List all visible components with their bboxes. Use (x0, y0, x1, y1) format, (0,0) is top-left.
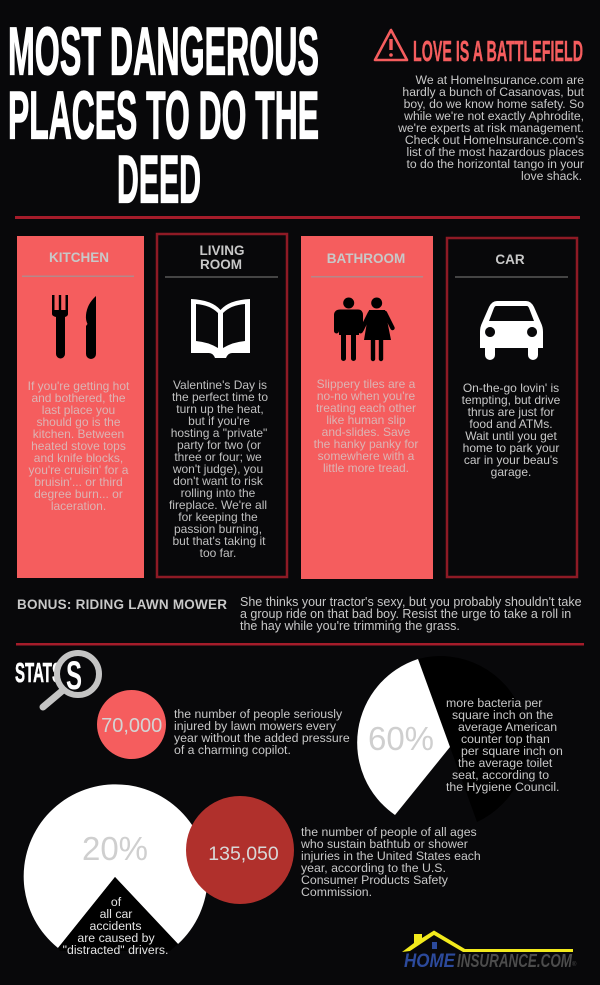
living room text: Valentine's Day is (173, 378, 267, 392)
bonus text: She thinks your tractor's sexy, but you probably shouldn't take (240, 595, 582, 609)
bathroom text: Slippery tiles are a (317, 377, 416, 391)
icon: magnifying glass (43, 653, 99, 707)
bathroom text: treating each other (316, 401, 416, 415)
panel: car (447, 238, 577, 577)
icon: fork and knife (52, 295, 96, 359)
stat: 135,050 (186, 796, 294, 904)
icon: magnifying glass: S (66, 654, 82, 698)
living room text: don't want to risk (173, 474, 264, 488)
logo: homeinsurance.com: ® (572, 961, 577, 968)
stat text: bathtub injuries: the number of people of all ages (301, 825, 477, 839)
stat text: lawn mowers: the number of people seriously (174, 707, 343, 721)
kitchen text: and knife blocks, (34, 451, 123, 465)
bathroom text: and-slides. Save (322, 425, 411, 439)
heading: living room: ROOM (200, 257, 242, 272)
icon: warning triangle (375, 30, 407, 60)
stat text: bacteria: the Hygiene Council. (446, 780, 559, 794)
stat text: car accidents: accidents (90, 919, 141, 933)
stat: 20% pie (24, 784, 208, 957)
kitchen text: kitchen. Between (33, 427, 124, 441)
car text: garage. (491, 465, 531, 479)
car text: food and ATMs. (469, 417, 553, 431)
bathroom text: little more tread. (323, 461, 409, 475)
living room text: hosting a "private" (171, 426, 267, 440)
bonus text: the hay while you're trimming the grass. (240, 619, 460, 633)
icon: car (480, 301, 543, 360)
icon: couple (336, 298, 392, 359)
heading: car: CAR (495, 252, 525, 267)
stat text: lawn mowers: of a charming copilot. (174, 743, 291, 757)
stat: 20% pie: 20% (82, 830, 148, 867)
stat text: bathtub injuries: who sustain bathtub or shower (300, 837, 468, 851)
kitchen text: and bothered, the (31, 391, 126, 405)
car text: home to park your (463, 441, 559, 455)
kitchen text: heated stove tops (31, 439, 126, 453)
living room text: but that's taking it (172, 534, 266, 548)
kitchen text: degree burn... or (34, 487, 123, 501)
car text: On-the-go lovin' is (463, 381, 559, 395)
living room text: won't judge), you (172, 462, 263, 476)
bonus heading: BONUS: RIDING LAWN MOWER (17, 597, 227, 612)
stat text: bacteria: average American (458, 720, 557, 734)
intro text: list of the most hazardous places (406, 145, 584, 159)
bathroom text: like human slip (326, 413, 406, 427)
stat text: lawn mowers: year without the added pressure (174, 731, 350, 745)
kitchen text: last place you (42, 403, 115, 417)
stat: 70,000: 70,000 (101, 715, 162, 737)
stat text: bathtub injuries: Commission. (301, 885, 372, 899)
kitchen text: you're cruisin' for a (29, 463, 129, 477)
intro text: boy, do we know home safety. So (404, 97, 584, 111)
car text: thrus are just for (468, 405, 554, 419)
stat: 70,000 (97, 690, 166, 759)
stat text: bathtub injuries: injuries in the United States each (301, 849, 481, 863)
bathroom text: the hanky panky for (314, 437, 418, 451)
title: DEED (117, 142, 201, 218)
icon: open book (191, 299, 250, 358)
living room text: turn up the heat, (176, 402, 264, 416)
stat text: bacteria: square inch on the (452, 708, 553, 722)
bonus text: a group ride on that bad boy. Resist the urge to take a roll in (240, 607, 571, 621)
heading: living room: LIVING (199, 243, 245, 258)
heading: kitchen: KITCHEN (49, 250, 109, 265)
car text: car in your beau's (464, 453, 558, 467)
stats heading: STATS (15, 657, 62, 688)
car text: tempting, but drive (462, 393, 561, 407)
stat text: car accidents: all car (100, 907, 132, 921)
stat text: bacteria: per square inch on (461, 744, 563, 758)
car text: Wait until you get (465, 429, 557, 443)
living room text: the perfect time to (172, 390, 268, 404)
living room text: party for two (or (177, 438, 261, 452)
kitchen text: bruisin'... or third (34, 475, 123, 489)
stat text: car accidents: are caused by (77, 931, 155, 945)
panel: living room (157, 234, 287, 577)
kitchen text: If you're getting hot (28, 379, 130, 393)
living room text: too far. (200, 546, 236, 560)
logo: homeinsurance.com (402, 930, 577, 972)
bathroom text: somewhere with a (318, 449, 415, 463)
stat text: car accidents: "distracted" drivers. (63, 943, 168, 957)
living room text: for keeping the (178, 510, 258, 524)
panel: bathroom (301, 236, 433, 579)
heading: bathroom: BATHROOM (327, 251, 405, 266)
title (8, 14, 319, 218)
stat text: lawn mowers: injured by lawn mowers every (174, 719, 337, 733)
intro text: to do the horizontal tango in your (406, 157, 584, 171)
stat: 60% pie: 60% (368, 720, 434, 757)
bathroom text: no-no when you're (317, 389, 416, 403)
stat: 60% pie (357, 656, 527, 822)
living room text: rolling into the (181, 486, 256, 500)
stat text: bathtub injuries: Consumer Products Safety (301, 873, 449, 887)
logo: homeinsurance.com: HOME (404, 951, 456, 972)
stat text: bacteria: seat, according to (452, 768, 549, 782)
living room text: but if you're (188, 414, 250, 428)
kitchen text: should go is the (36, 415, 121, 429)
stat text: bacteria: the average toilet (458, 756, 553, 770)
stat text: bathtub injuries: year, according to the U.S. (301, 861, 446, 875)
intro text: we're experts at risk management. (397, 121, 584, 135)
intro text: hardly a bunch of Casanovas, but (402, 85, 585, 99)
intro text: We at HomeInsurance.com are (416, 73, 584, 87)
stat: 135,050: 135,050 (208, 843, 279, 865)
intro text: love shack. (521, 169, 582, 183)
kitchen text: laceration. (51, 499, 106, 513)
stat text: car accidents: of (111, 895, 122, 909)
intro text: while we're not exactly Aphrodite, (403, 109, 584, 123)
living room text: three or four; we (174, 450, 262, 464)
living room text: passion burning, (174, 522, 262, 536)
intro text: Check out HomeInsurance.com's (405, 133, 584, 147)
stat text: bacteria: counter top than (461, 732, 550, 746)
panel: kitchen (17, 236, 144, 578)
living room text: fireplace. We're all (169, 498, 267, 512)
stat text: bacteria: more bacteria per (446, 696, 542, 710)
